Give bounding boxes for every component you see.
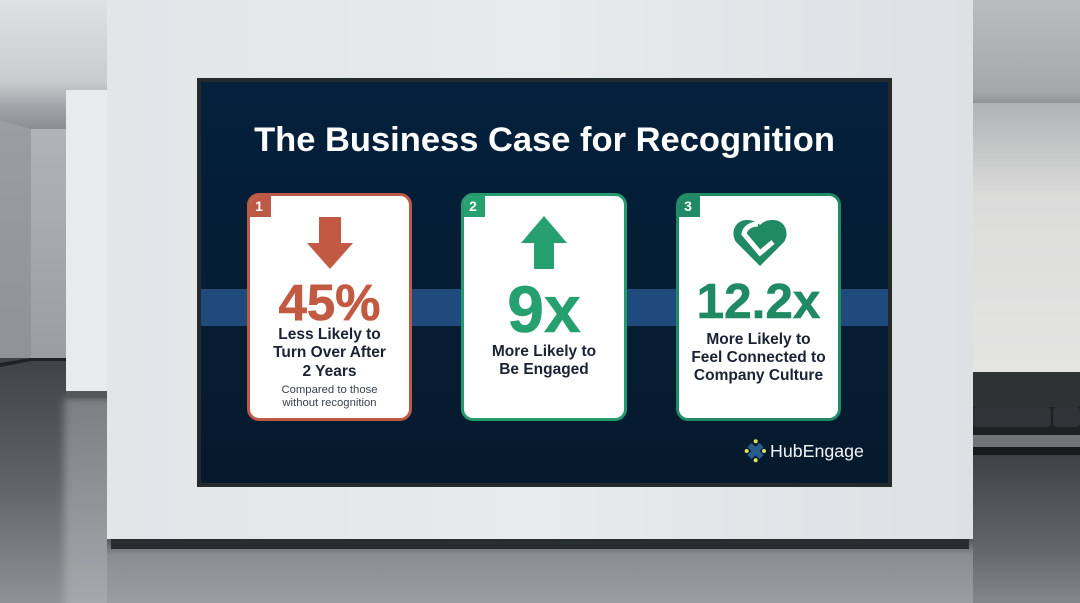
label: More Likely to — [492, 343, 596, 360]
label: More Likely to — [706, 330, 811, 348]
label — [273, 326, 386, 380]
badge 2: 2 — [469, 198, 477, 214]
label: 2 Years — [302, 363, 357, 380]
icon: logo mark — [744, 439, 766, 462]
label: Turn Over After — [273, 344, 386, 361]
panel: card 1 — [247, 193, 412, 421]
icon: up arrow — [521, 216, 567, 269]
stat 12.2x: 12.2x — [697, 274, 820, 329]
icon: down arrow — [307, 217, 353, 269]
note: without recognition — [282, 397, 377, 409]
stat 45%: 45% — [278, 274, 381, 331]
logo wordmark: HubEngage — [770, 441, 864, 461]
badge 2 — [461, 193, 485, 217]
note: Compared to those — [281, 384, 378, 396]
label: Less Likely to — [278, 326, 381, 343]
panel: card 2 — [461, 193, 627, 421]
horizontal band — [201, 289, 888, 326]
stat 9x: 9x — [507, 272, 581, 346]
badge 3: 3 — [684, 198, 692, 214]
label — [492, 343, 596, 378]
label: Be Engaged — [499, 361, 589, 378]
panel: card 3 — [676, 193, 841, 421]
badge 1 — [247, 193, 271, 217]
label: Feel Connected to — [691, 349, 826, 366]
panel: wall screen — [197, 78, 892, 487]
note — [281, 384, 378, 409]
badge 3 — [676, 193, 700, 217]
icon: heart check — [733, 220, 787, 266]
label — [691, 330, 826, 384]
title: The Business Case for Recognition — [254, 121, 835, 159]
label: Company Culture — [694, 367, 823, 384]
logo: HubEngage — [744, 439, 864, 462]
badge 1: 1 — [255, 198, 263, 214]
